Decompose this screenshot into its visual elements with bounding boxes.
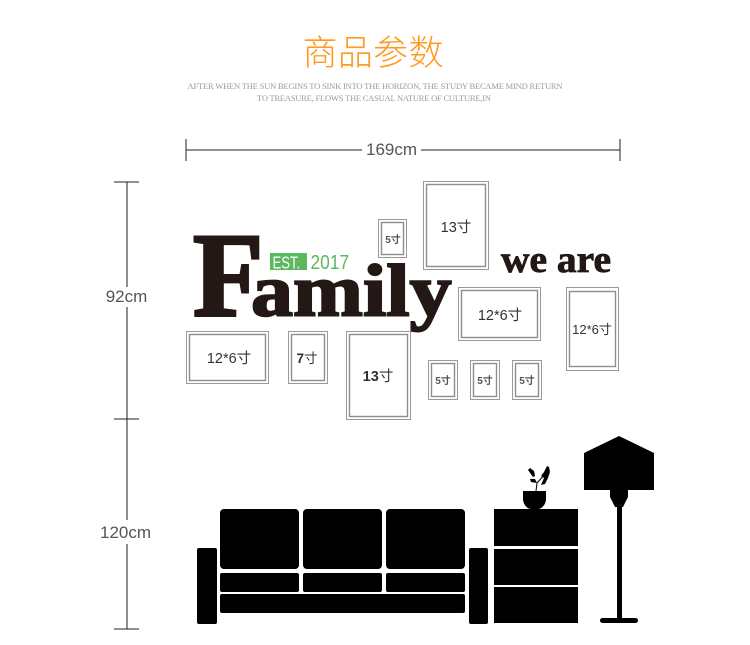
- title: 商品参数: [302, 34, 444, 73]
- frame: 12*6 inch middle: 12*6寸: [478, 307, 522, 324]
- frame: 5 inch bottom centre: 5寸: [477, 374, 493, 387]
- badge: EST. 2017: [270, 251, 349, 273]
- frame: 5 inch bottom left: 5寸: [435, 374, 451, 387]
- frame: 7 inch: [288, 332, 328, 384]
- icon: floor lamp: [584, 436, 654, 623]
- wordmark: Family: amily: [251, 250, 452, 332]
- subtitle text: TO TREASURE, FLOWS THE CASUAL NATURE OF CULTURE,IN: [257, 93, 491, 103]
- badge: EST. 2017: 2017: [310, 251, 349, 273]
- frame: 13 inch bottom: 13寸: [363, 368, 393, 385]
- badge: EST. 2017: EST.: [272, 254, 300, 273]
- wordmark: Family: F: [193, 209, 263, 342]
- frame: 12*6 inch right: [566, 288, 618, 370]
- icon: sofa: [197, 509, 488, 624]
- frame: 13 inch top: [424, 182, 488, 270]
- height dimension: 92cm and 120cm: 120cm: [100, 523, 151, 542]
- subtitle text: [188, 81, 562, 103]
- frame: 5 inch bottom right: [512, 360, 542, 400]
- frame: 12*6 inch left: [186, 332, 268, 384]
- frame: 7 inch: 7寸: [296, 351, 318, 366]
- subtitle text: AFTER WHEN THE SUN BEGINS TO SINK INTO THE HORIZON, THE STUDY BECAME MIND RETURN: [188, 81, 562, 91]
- frame: 12*6 inch right: 12*6寸: [572, 322, 612, 337]
- height dimension: 92cm and 120cm: 92cm: [106, 287, 147, 306]
- frame: 12*6 inch left: 12*6寸: [207, 350, 251, 367]
- frame: 13 inch bottom: [346, 332, 410, 420]
- icon: cabinet: [494, 509, 578, 623]
- width dimension: 169cm: [186, 139, 620, 161]
- frame: 5 inch top: [378, 220, 406, 258]
- frame: 5 inch bottom left: [428, 360, 458, 400]
- frame: 12*6 inch middle: [458, 288, 540, 340]
- frame: 5 inch top: 5寸: [385, 233, 401, 246]
- width dimension: 169cm: 169cm: [366, 140, 417, 159]
- wordmark: we are: we are: [501, 239, 611, 281]
- frame: 5 inch bottom centre: [470, 360, 500, 400]
- height dimension: 92cm and 120cm: [100, 182, 151, 629]
- frame: 13 inch top: 13寸: [441, 219, 471, 236]
- frame: 5 inch bottom right: 5寸: [519, 374, 535, 387]
- icon: potted plant: [523, 466, 550, 509]
- wordmark: Family: [193, 209, 452, 342]
